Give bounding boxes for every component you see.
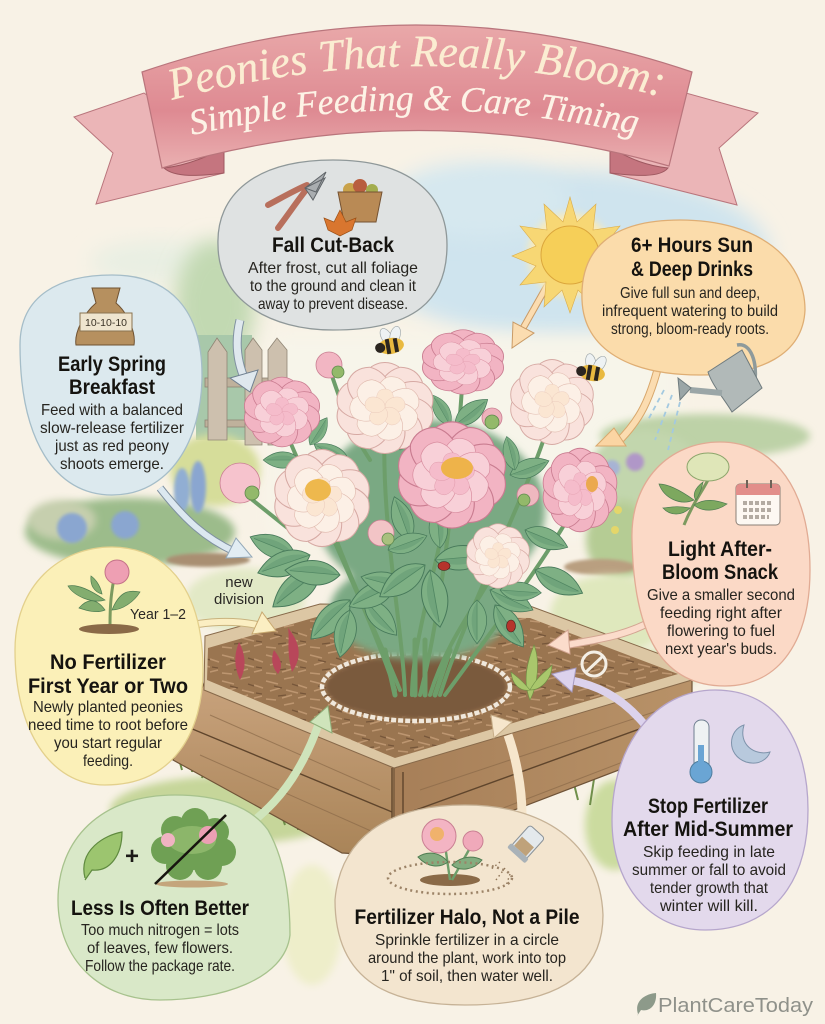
heading: stop fertilizer: After Mid-Summer — [623, 817, 794, 841]
icon: calendar — [736, 480, 780, 525]
pink peony right — [539, 446, 621, 534]
panel: early spring breakfast — [20, 275, 202, 495]
cream peony top — [332, 360, 438, 456]
icon: fertilizer bag — [76, 288, 134, 345]
icon: crescent moon — [732, 725, 770, 763]
leaves — [246, 391, 588, 659]
bed plank lines — [190, 710, 692, 856]
heading: stop fertilizer: Stop Fertilizer — [648, 794, 769, 818]
ladybugs — [438, 562, 516, 632]
icon: crossed-out bush — [151, 808, 236, 888]
label: new division: new — [225, 574, 253, 591]
picket fence — [205, 338, 287, 445]
big pink peony — [393, 419, 511, 531]
icon: small peony plant — [659, 453, 729, 525]
soil with mulch — [207, 616, 678, 758]
text: stop fertilizer: winter will kill. — [659, 898, 758, 915]
text: less is often better: of leaves, few flowers. — [87, 940, 233, 957]
icon: leaf — [84, 832, 122, 880]
panel: stop fertilizer after mid-summer — [612, 690, 808, 930]
no-fertilizer symbol — [582, 652, 606, 676]
title ribbon: Simple Feeding & Care Timing — [191, 86, 639, 140]
text: light after-bloom: next year's buds. — [665, 641, 777, 658]
text: stop fertilizer — [632, 844, 786, 915]
icon: seedling — [68, 560, 140, 634]
text: less is often better: Follow the package rate. — [85, 958, 235, 975]
arrow: fall cut-back to fence — [230, 320, 258, 392]
halo inner soil — [326, 656, 506, 718]
heading: fall cut-back: Fall Cut-Back — [272, 233, 394, 257]
cream peony half-open — [463, 522, 533, 590]
text: sun and water: infrequent watering to build — [602, 303, 778, 320]
ribbon main band — [142, 25, 692, 168]
heading: sun and water — [631, 233, 753, 281]
icon: fertilizer shaker — [490, 824, 546, 886]
panel: fall cut-back — [218, 160, 447, 330]
text: fall cut-back — [248, 260, 418, 313]
text: early spring breakfast: Feed with a balanced — [41, 402, 183, 419]
panel: sun and water — [582, 220, 805, 375]
panel: no fertilizer first year — [15, 547, 203, 785]
heading: light after-bloom: Bloom Snack — [662, 560, 778, 584]
bees — [372, 324, 610, 383]
text: early spring breakfast: just as red peony — [54, 438, 169, 455]
text: sun and water: Give full sun and deep, — [620, 285, 760, 302]
title line 2 — [192, 110, 640, 135]
text: less is often better: Too much nitrogen = lots — [81, 922, 239, 939]
text: no fertilizer: you start regular — [54, 735, 163, 752]
icon: plus: + — [125, 843, 139, 870]
heading: stop fertilizer — [623, 794, 794, 841]
text: light after-bloom: Give a smaller second — [647, 587, 795, 604]
text: fertilizer halo — [368, 932, 566, 985]
label: year 1-2: Year 1–2 — [130, 606, 186, 623]
buds — [220, 352, 539, 546]
icon: watering can — [648, 345, 762, 450]
ribbon right tail — [610, 93, 758, 205]
title ribbon: Peonies That Really Bloom: — [169, 36, 663, 100]
heading: early spring breakfast: Early Spring — [58, 352, 166, 376]
sky wash — [90, 162, 770, 535]
text: early spring breakfast — [40, 402, 185, 473]
heading: fertilizer halo: Fertilizer Halo, Not a Pile — [354, 905, 580, 929]
text: light after-bloom: feeding right after — [660, 605, 783, 622]
text: fertilizer halo: 1" of soil, then water well. — [381, 968, 553, 985]
heading: light after-bloom: Light After- — [668, 537, 772, 561]
red peony shoots — [235, 628, 299, 680]
label: new division: division — [214, 591, 264, 608]
heading: less is often better: Less Is Often Better — [71, 896, 250, 920]
arrow: sun bubble to plant — [596, 360, 660, 446]
bed left wall — [173, 683, 394, 856]
icon: maple leaf — [324, 210, 356, 236]
panel: less is often better — [58, 795, 290, 1000]
ribbon folds — [164, 148, 224, 175]
text: stop fertilizer: summer or fall to avoid — [632, 862, 786, 879]
arrow: after-bloom to soil — [548, 622, 650, 654]
arrow: sun to plant — [512, 284, 548, 348]
text: fall cut-back: After frost, cut all foliage — [248, 260, 418, 277]
arrow: less is better to halo — [248, 706, 332, 825]
icon: mini peony with dotted ring — [388, 819, 512, 894]
heading: sun and water: 6+ Hours Sun — [631, 233, 753, 257]
title ribbon — [73, 24, 759, 206]
foliage mass — [315, 420, 545, 660]
cream peony right — [506, 357, 598, 447]
arrow: early spring to plant — [160, 488, 252, 558]
pink peony top right — [418, 328, 508, 396]
text: fall cut-back: away to prevent disease. — [258, 296, 408, 313]
text: light after-bloom — [647, 587, 795, 658]
text: fertilizer halo: Sprinkle fertilizer in a circle — [375, 932, 559, 949]
young sprout — [511, 645, 552, 700]
icon: thermometer — [690, 720, 712, 783]
text: early spring breakfast: shoots emerge. — [60, 456, 164, 473]
arrow: no fertilizer to shoots — [198, 612, 276, 634]
heading: early spring breakfast: Breakfast — [69, 375, 155, 399]
text: sun and water: strong, bloom-ready roots. — [611, 321, 769, 338]
pink peony left — [240, 375, 324, 449]
raised wooden bed — [173, 604, 692, 856]
heading: sun and water: & Deep Drinks — [631, 257, 753, 281]
text: fertilizer halo: around the plant, work into top — [368, 950, 566, 967]
text: less is often better — [81, 922, 239, 975]
heading: no fertilizer — [28, 650, 188, 698]
logo: PlantCareToday: PlantCareToday — [658, 995, 813, 1017]
bed right wall — [394, 672, 692, 856]
stems — [240, 370, 580, 695]
text: fall cut-back: to the ground and clean it — [250, 278, 417, 295]
icon: sun — [512, 197, 628, 313]
panel: light after-bloom snack — [632, 442, 810, 686]
back rim — [204, 604, 692, 768]
text: sun and water — [602, 285, 778, 338]
text: no fertilizer: Newly planted peonies — [33, 699, 183, 716]
fertilizer halo ring — [322, 653, 510, 721]
heading: no fertilizer: First Year or Two — [28, 674, 188, 698]
peony plant — [220, 328, 621, 695]
title line 1 — [172, 66, 655, 100]
ribbon left tail — [74, 93, 224, 204]
text: stop fertilizer: Skip feeding in late — [643, 844, 775, 861]
arrow: stop fertilizer — [552, 668, 645, 725]
text: light after-bloom: flowering to fuel — [667, 623, 775, 640]
icon: pruners — [268, 172, 326, 228]
icon: fertilizer bag: 10-10-10 — [85, 317, 127, 329]
text: no fertilizer: need time to root before — [28, 717, 188, 734]
text: early spring breakfast: slow-release fertilizer — [40, 420, 185, 437]
background garden foliage — [25, 240, 810, 985]
cream peony left — [270, 447, 374, 549]
text: no fertilizer — [28, 699, 188, 770]
text: no fertilizer: feeding. — [83, 753, 133, 770]
heading: no fertilizer: No Fertilizer — [50, 650, 167, 674]
heading: early spring breakfast — [58, 352, 166, 399]
arrow: halo bubble to ring — [491, 715, 522, 815]
panel: fertilizer halo — [335, 805, 603, 1005]
icon: harvest basket — [338, 179, 382, 222]
heading: light after-bloom — [662, 537, 778, 584]
text: stop fertilizer: tender growth that — [650, 880, 769, 897]
